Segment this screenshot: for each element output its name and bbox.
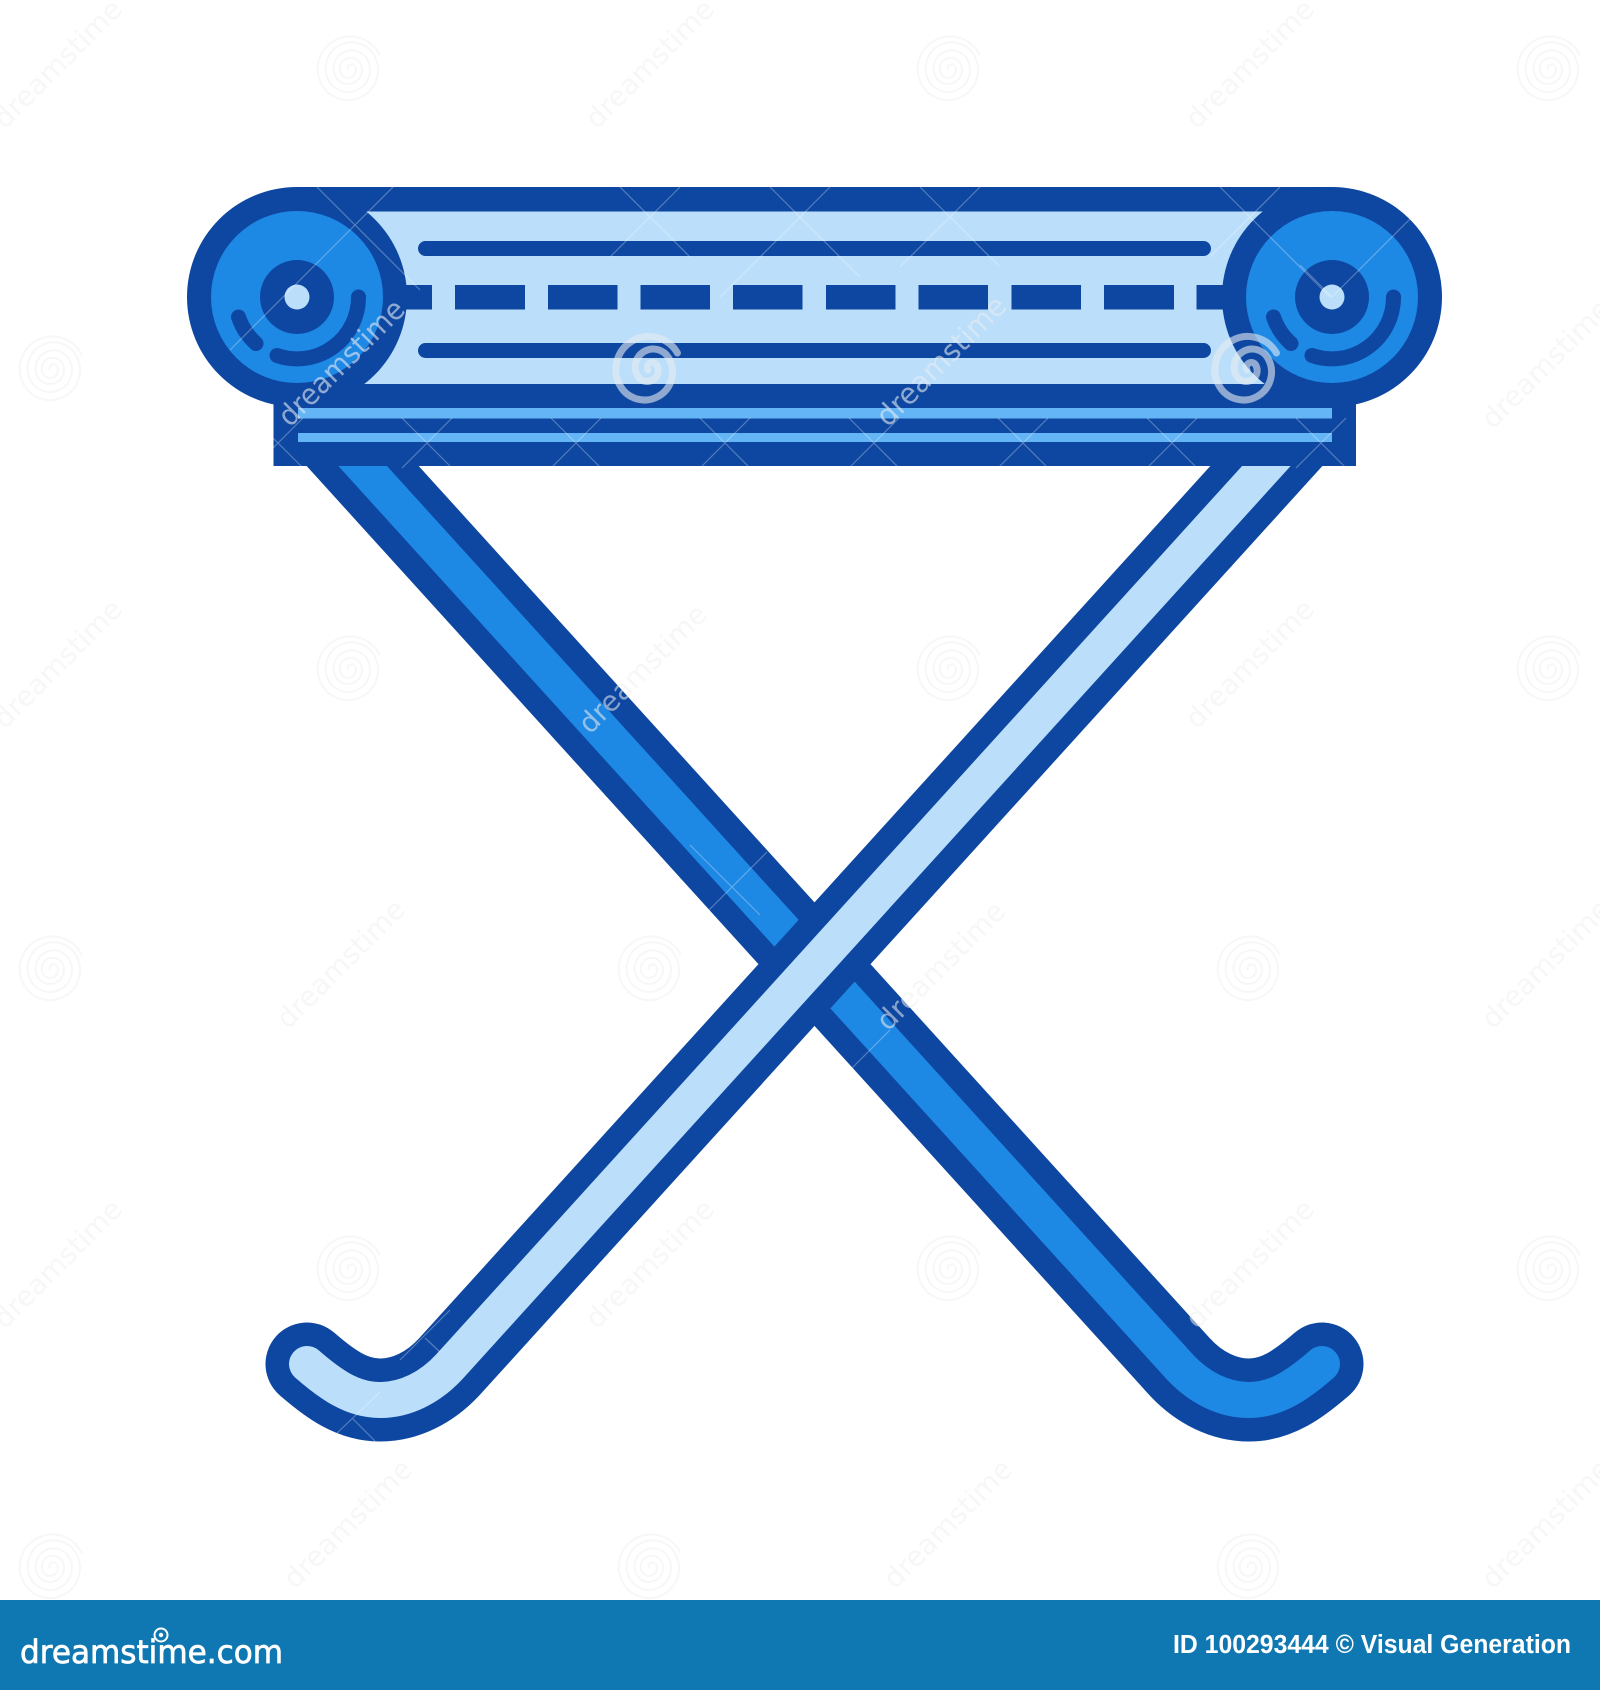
watermark layer: dreamstime <box>579 1193 721 1335</box>
watermark layer: dreamstime <box>877 1453 1019 1595</box>
seat fabric with stitching <box>297 187 1332 408</box>
watermark layer: dreamstime <box>277 1453 419 1595</box>
seat base rail <box>274 380 1356 466</box>
footer logo: dreamstime.com: dreamstime.com <box>20 1633 283 1671</box>
stool leg: light blue, running to lower left <box>307 430 1299 1400</box>
right seat roller <box>1222 187 1442 407</box>
left seat roller <box>187 187 407 407</box>
watermark layer: dreamstime <box>572 598 714 740</box>
watermark over the icon: dreamstime <box>271 292 412 433</box>
stool leg: dark blue, running to lower right <box>330 430 1322 1400</box>
footer bar <box>0 1600 1600 1690</box>
watermark over the icon <box>230 160 1410 1441</box>
watermark layer: dreamstime <box>270 893 412 1035</box>
watermark layer: dreamstime <box>870 895 1012 1037</box>
watermark layer: dreamstime <box>1179 1193 1321 1335</box>
footer image ID and credit: ID 100293444 © Visual Generation <box>1173 1631 1571 1659</box>
icon: folding stool <box>187 187 1442 1400</box>
watermark over the icon: dreamstime <box>869 289 1013 433</box>
watermark layer: dreamstime <box>1179 593 1321 735</box>
